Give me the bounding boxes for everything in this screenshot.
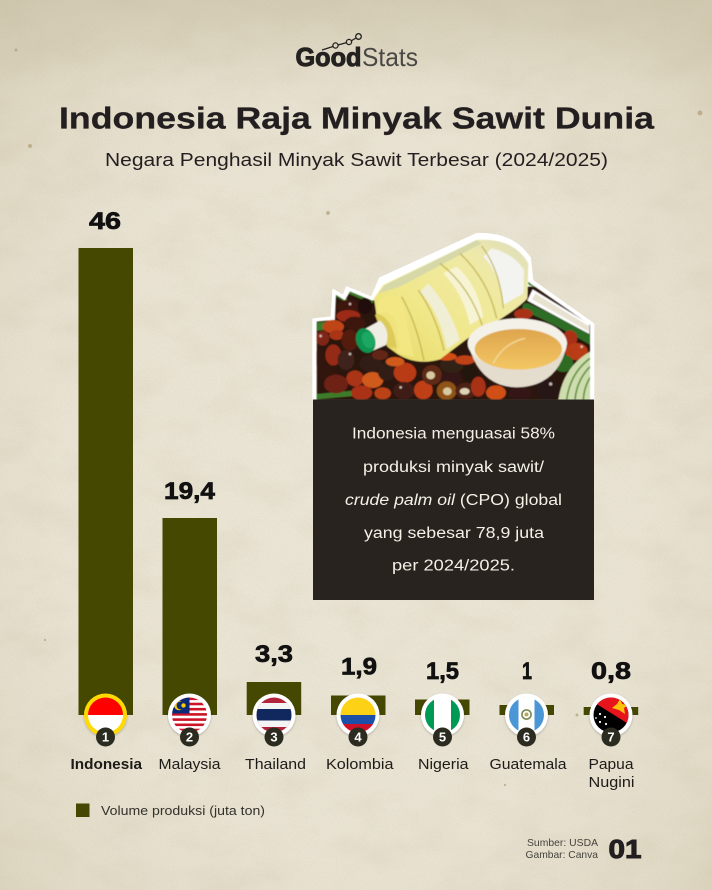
flag: Thailand (252, 694, 296, 746)
title: Indonesia Raja Minyak Sawit Dunia (59, 100, 655, 136)
photo: palm oil bottle, bowl and fruits (313, 234, 597, 400)
label: Papua Nugini: Nugini (588, 775, 634, 791)
flag: Malaysia: 2 (186, 730, 193, 744)
label: Thailand: Thailand (245, 757, 306, 773)
leaves (317, 283, 593, 397)
flag: Papua Nugini (590, 694, 632, 746)
flag: Kolombia (336, 694, 380, 746)
label: Papua Nugini: Papua (588, 757, 634, 773)
flag: Indonesia (84, 694, 127, 746)
bar: Kolombia (331, 696, 386, 715)
source credits (526, 837, 598, 861)
flag: Kolombia: 4 (354, 730, 362, 744)
logo: GoodStats (296, 34, 418, 72)
flag: Thailand: 3 (270, 730, 278, 744)
flag: Papua Nugini: 7 (607, 730, 615, 744)
source credits: Sumber: USDA (527, 837, 598, 849)
flag: Nigeria: 5 (439, 730, 446, 744)
bar chart: palm oil production (78, 208, 638, 715)
label: Kolombia: Kolombia (326, 757, 395, 773)
callout panel (313, 400, 594, 600)
oil bottle (352, 240, 528, 362)
bar: Malaysia (162, 518, 217, 715)
flag: Guatemala: 6 (523, 730, 530, 744)
callout text: crude palm oil (CPO) global (345, 492, 562, 509)
callout text: yang sebesar 78,9 juta (364, 525, 544, 542)
flag: Guatemala (505, 694, 548, 746)
callout text: produksi minyak sawit/ (363, 459, 545, 476)
subtitle: Negara Penghasil Minyak Sawit Terbesar (2024/2025) (105, 149, 608, 170)
value: 19,4: 19,4 (164, 478, 216, 505)
value: 46: 46 (89, 208, 121, 235)
flag: Indonesia: 1 (102, 730, 109, 744)
logo: GoodStats: Stats (362, 42, 418, 72)
value: 1: 1 (522, 658, 532, 685)
value: 1,9: 1,9 (341, 654, 377, 680)
value: 3,3: 3,3 (255, 641, 293, 668)
bar: Nigeria (415, 700, 470, 715)
bar: Guatemala (500, 705, 554, 715)
logo: GoodStats: Good (296, 42, 362, 72)
flag: Malaysia (168, 694, 211, 746)
photo white cutout outline (313, 234, 593, 400)
country labels (70, 757, 634, 791)
callout text (345, 426, 562, 574)
bowl of oil (468, 318, 567, 387)
bar: Papua Nugini (584, 707, 638, 715)
value: 0,8: 0,8 (591, 658, 631, 685)
page number: 01 (608, 834, 642, 864)
legend: Volume produksi (juta ton) (101, 804, 265, 818)
flag: Nigeria (421, 694, 464, 746)
callout text: per 2024/2025. (392, 558, 515, 574)
palm fruits (315, 298, 592, 400)
logo chart line icon (322, 34, 361, 50)
label: Malaysia: Malaysia (158, 757, 222, 773)
callout text: Indonesia menguasai 58% (352, 426, 555, 442)
source credits: Gambar: Canva (526, 849, 598, 861)
bar: Thailand (247, 682, 301, 715)
bottle cap (360, 321, 387, 353)
value: 1,5: 1,5 (426, 658, 459, 685)
label: Nigeria: Nigeria (418, 757, 470, 773)
paper gap between leaves (527, 289, 589, 334)
label: Indonesia: Indonesia (70, 757, 143, 773)
label: Guatemala: Guatemala (490, 757, 568, 773)
bar: Indonesia (78, 248, 133, 715)
